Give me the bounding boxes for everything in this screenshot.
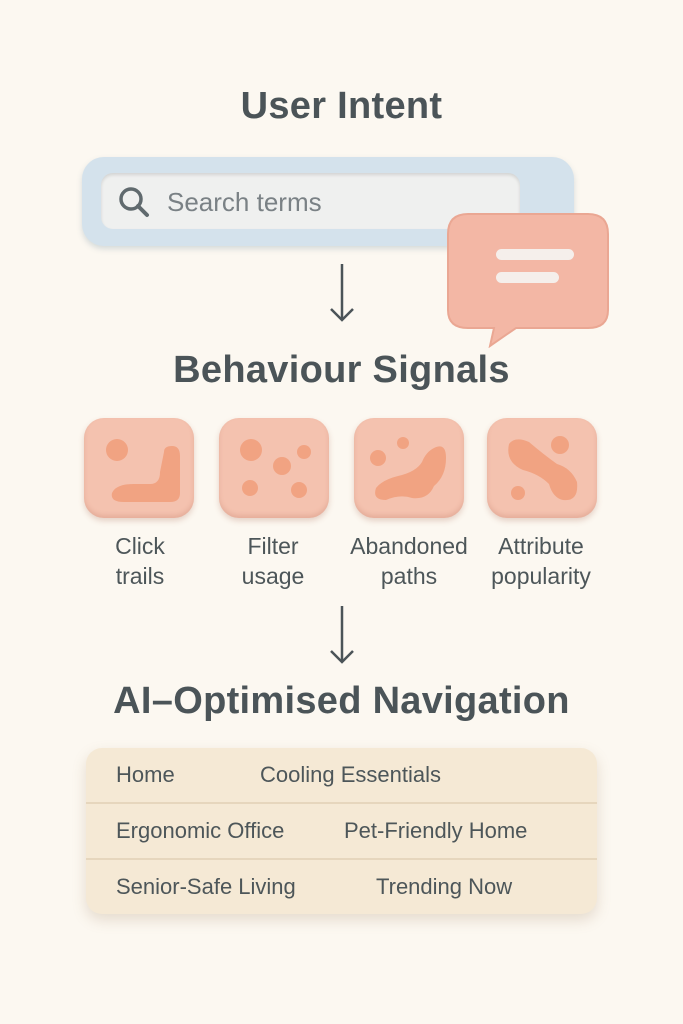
label: abandoned paths: Abandoned (350, 533, 468, 559)
nav row 3 (116, 874, 512, 899)
nav row 1: Cooling Essentials (260, 762, 441, 787)
label: abandoned paths (350, 533, 468, 589)
nav row 2: Pet-Friendly Home (344, 818, 527, 843)
nav row 1: Home (116, 762, 175, 787)
icon: abandoned paths (354, 418, 464, 518)
nav row 1 (86, 748, 597, 804)
icon: chat bubble (447, 213, 609, 348)
icon: magnifier (119, 187, 150, 218)
title: behaviour signals: Behaviour Signals (173, 349, 510, 391)
search input (101, 173, 520, 229)
search bar (82, 157, 574, 246)
nav row 2 (86, 804, 597, 860)
label: filter usage: Filter (247, 533, 299, 559)
nav row 3: Trending Now (376, 874, 512, 899)
nav row 2: Ergonomic Office (116, 818, 284, 843)
label: attribute popularity: Attribute (498, 533, 584, 559)
label: attribute popularity: popularity (491, 563, 591, 589)
search text: Search terms (167, 187, 322, 217)
label: click trails: trails (116, 563, 164, 589)
navigation panel (86, 748, 597, 914)
label: click trails (115, 533, 165, 589)
icon: attribute popularity (487, 418, 597, 518)
icon: click trails (84, 418, 194, 518)
arrow down 1 (330, 264, 354, 322)
label: filter usage (242, 533, 304, 589)
nav row 3: Senior-Safe Living (116, 874, 296, 899)
title: user intent: User Intent (241, 85, 442, 127)
label: attribute popularity (491, 533, 591, 589)
title: ai-optimised navigation: AI–Optimised Navigation (113, 680, 570, 722)
icon: filter usage (219, 418, 329, 518)
label: click trails: Click (115, 533, 165, 559)
label: abandoned paths: paths (381, 563, 437, 589)
label: filter usage: usage (242, 563, 304, 589)
arrow down 2 (330, 606, 354, 664)
